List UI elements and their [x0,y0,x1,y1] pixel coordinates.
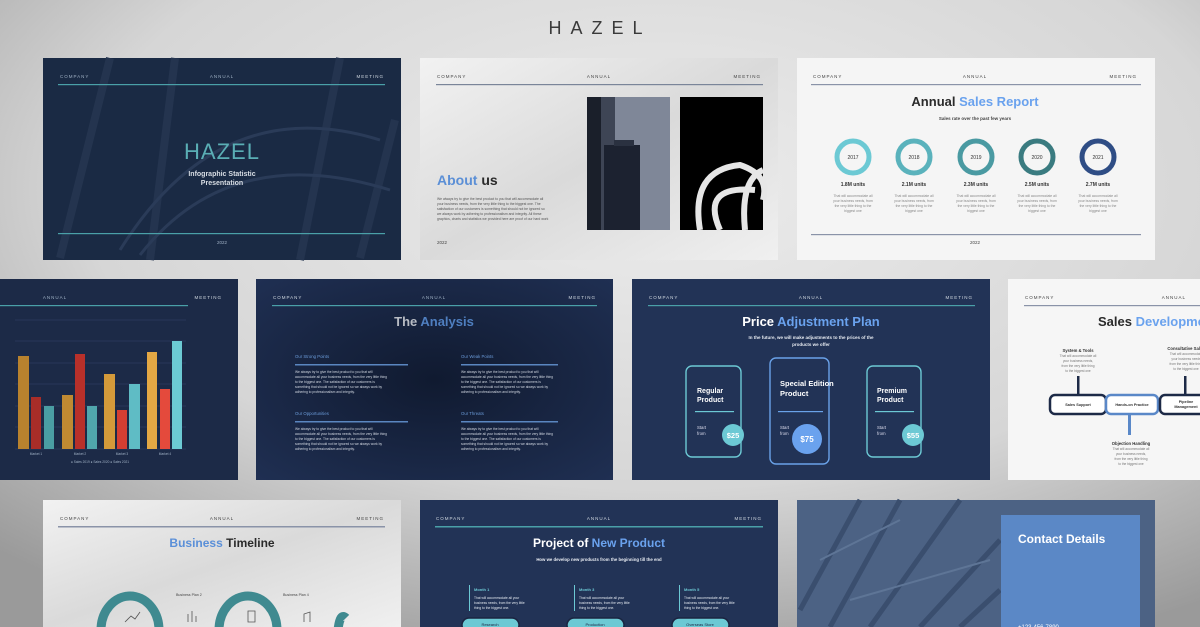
slide: annual sales report: COMPANY [813,74,842,79]
slide: the analysis: We always try to give the best product to you that will [461,427,539,431]
analysis blocks: Our Weak Points [461,354,493,359]
slide: the analysis: We always try to give the best product to you that will [295,427,373,431]
ring chart: 2021 [1092,155,1104,161]
slide: business timeline: Business Plan 4 [283,593,309,597]
slide: the analysis: adhering to professionalism and integrity. [461,390,521,394]
month columns: business needs, from the very little [579,601,630,605]
process diagram: Pipeline [1179,400,1193,404]
ring chart: That will accommodate all [894,194,934,198]
slide: annual sales report [797,58,1155,260]
slide: about us: your business needs, from the very little thing to the biggest one. The [437,202,541,206]
card: regular: $25 [727,431,739,440]
slide: project of new product: ANNUAL [587,516,611,521]
ring chart: biggest one [844,209,862,213]
slide: the analysis: to the biggest one. The satisfaction of our customers is [461,380,541,384]
slide: price adjustment: Price Adjustment Plan [742,314,880,329]
slide: sales development: ANNUAL [1162,295,1186,300]
process diagram: your business needs, [1116,452,1146,456]
month columns: thing to the biggest one. [474,606,509,610]
month columns: Month 1 [474,587,490,592]
month columns: thing to the biggest one. [684,606,719,610]
slide: the analysis: We always try to give the best product to you that will [295,370,373,374]
slide: the analysis: accommodate all your business needs, from the very little thing [461,375,553,379]
slide: cover: Presentation [201,180,243,187]
process diagram: to the biggest one [1173,367,1199,371]
contact box [1001,515,1140,627]
slide: bar chart [0,279,238,480]
slide: annual sales report: ANNUAL [963,74,987,79]
ring chart: your business needs, from [956,199,996,203]
slide: business timeline: Business Plan 2 [176,593,202,597]
slide: business timeline: Business Timeline [169,536,275,550]
slide: bar chart: ● Sales 2019 ● Sales 2020 ● Sales 2021 [71,460,129,464]
card: special edition [770,358,834,464]
slide: annual sales report: 2022 [970,240,981,245]
slide: the analysis: something that should not be ignored so we always work by [295,385,382,389]
month columns: That will accommodate all your [579,596,625,600]
month columns: Overseas Store [686,622,715,627]
bars [18,341,182,449]
photo: white loops [680,97,764,230]
slide: cover: Infographic Statistic [188,171,256,178]
slide: annual sales report: MEETING [1109,74,1137,79]
slide: business timeline: ANNUAL [210,516,234,521]
ring chart: your business needs, from [1078,199,1118,203]
process diagram: your business needs [1171,357,1200,361]
photo: tower [587,97,670,230]
month columns: That will accommodate all your [684,596,730,600]
ring chart: That will accommodate all [1017,194,1057,198]
card: premium [867,366,924,457]
card: special edition: from [780,431,789,436]
slide: the analysis: adhering to professionalism and integrity. [461,447,521,451]
slide: sales development: COMPANY [1025,295,1054,300]
ring chart: the very little thing to the [1019,204,1055,208]
ring chart: the very little thing to the [958,204,994,208]
slide: the analysis: something that should not be ignored so we always work by [461,442,548,446]
ring chart [833,141,1118,213]
slide: project of new product: Project of New Product [533,536,665,550]
slide: cover: 2022 [217,240,228,245]
process diagram: System & Tools [1062,348,1094,353]
slide: about us [420,58,778,260]
card: regular [686,366,744,457]
month columns [462,585,735,627]
slide: the analysis: The Analysis [394,314,474,329]
ring chart: the very little thing to the [896,204,932,208]
slide: the analysis: accommodate all your business needs, from the very little thing [295,375,387,379]
slide: price adjustment: MEETING [945,295,973,300]
slide: the analysis: adhering to professionalism and integrity. [295,447,355,451]
slide: price adjustment [632,279,990,480]
analysis blocks: Our Strong Points [295,354,329,359]
slide: bar chart: Market 4 [159,452,171,456]
ring chart: 2020 [1031,155,1043,161]
process diagram: from the very little thing [1115,457,1148,461]
ring chart: 1.8M units [841,182,865,188]
slide: about us: MEETING [733,74,761,79]
brand title: HAZEL [548,18,652,38]
ring chart: your business needs, from [894,199,934,203]
slide: project of new product: How we develop new products from the beginning till the end [536,557,662,562]
slide: the analysis: MEETING [568,295,596,300]
process diagram: Hands-on Practice [1115,403,1149,407]
slide: the analysis: accommodate all your business needs, from the very little thing [295,432,387,436]
ring chart: 2019 [970,155,982,161]
slide: the analysis: accommodate all your business needs, from the very little thing [461,432,553,436]
slide: bar chart: Market 3 [116,452,128,456]
slide: the analysis: to the biggest one. The satisfaction of our customers is [461,437,541,441]
slide: business timeline: MEETING [356,516,384,521]
slide: the analysis: We always try to give the best product to you that will [461,370,539,374]
ring chart: 2.1M units [902,182,926,188]
slide: the analysis: something that should not be ignored so we always work by [295,442,382,446]
process diagram: Objection Handling [1112,441,1151,446]
ring chart: 2.5M units [1025,182,1049,188]
slide: about us: We always try to give the best product to you that will accommodate all [437,197,543,201]
slide: the analysis: something that should not be ignored so we always work by [461,385,548,389]
analysis blocks [295,354,493,416]
slide: cover: COMPANY [60,74,89,79]
month columns: Month 3 [579,587,595,592]
ring chart: 2017 [847,155,859,161]
month columns: business needs, from the very little [474,601,525,605]
card: regular: Product [697,397,724,404]
slide: project of new product: COMPANY [436,516,465,521]
ring chart: 2018 [908,155,920,161]
slide: annual sales report: Sales rate over the past few years [939,116,1012,121]
ring chart: That will accommodate all [833,194,873,198]
ring chart: biggest one [905,209,923,213]
slide: the analysis: COMPANY [273,295,302,300]
slide: bar chart: Market 2 [74,452,86,456]
slide: cover: MEETING [356,74,384,79]
process diagram [1050,346,1200,466]
ring chart: biggest one [967,209,985,213]
ring chart: the very little thing to the [1080,204,1116,208]
slide: about us: 2022 [437,240,448,245]
slide: business timeline [43,500,401,627]
ring chart: biggest one [1089,209,1107,213]
process diagram: Management [1174,405,1198,409]
card: premium: Product [877,397,904,404]
about heading: About us [437,172,498,188]
month columns: Production [585,622,605,627]
card: premium: Premium [877,388,907,395]
ring chart: the very little thing to the [835,204,871,208]
month columns: Research [481,622,499,627]
slide: about us: graphics, charts and statistics we provided here are proof of our hard work [437,217,549,221]
slide: the analysis: to the biggest one. The satisfaction of our customers is [295,380,375,384]
ring chart: your business needs, from [1017,199,1057,203]
slide: bar chart: MEETING [194,295,222,300]
slide: about us: we always work by adhering to professionalism and integrity. All these [437,212,542,216]
process diagram: your business needs, [1063,359,1093,363]
slide: bar chart: Market 1 [30,452,42,456]
process diagram: to the biggest one [1065,369,1091,373]
card: special edition: Start [780,425,790,430]
slide: about us: satisfaction of our customers is something that should not be ignored so [437,207,545,211]
month columns: That will accommodate all your [474,596,520,600]
cover title: HAZEL [184,139,260,164]
slide: about us: ANNUAL [587,74,611,79]
card: regular: from [697,431,706,436]
month columns: thing to the biggest one. [579,606,614,610]
card: special edition: Special Edition [780,379,834,388]
ring chart: That will accommodate all [1078,194,1118,198]
process diagram: Sales Support [1065,403,1091,407]
ring chart: 2.3M units [964,182,988,188]
ring chart: That will accommodate all [956,194,996,198]
process diagram: That will accommodate all [1060,354,1097,358]
process diagram: from the very little thing [1062,364,1095,368]
process diagram: That will accommodate all [1113,447,1150,451]
ring chart: 2.7M units [1086,182,1110,188]
ring chart: biggest one [1028,209,1046,213]
slide: annual sales report: Annual Sales Report [911,94,1039,109]
slide: sales development [1008,279,1200,480]
card: regular: Regular [697,388,723,395]
slide: price adjustment: ANNUAL [799,295,823,300]
card: special edition: Product [780,389,809,398]
slide: about us: COMPANY [437,74,466,79]
month columns: business needs, from the very little [684,601,735,605]
slide: cover [43,58,401,260]
slide: the analysis: adhering to professionalism and integrity. [295,390,355,394]
slide: contact details [797,500,1155,627]
slide: the analysis: to the biggest one. The satisfaction of our customers is [295,437,375,441]
slide: price adjustment: In the future, we will make adjustments to the prices of the [748,335,874,340]
slide: project of new product: MEETING [734,516,762,521]
slide: price adjustment: COMPANY [649,295,678,300]
ring chart: your business needs, from [833,199,873,203]
slide: bar chart: ANNUAL [43,295,67,300]
card: special edition: $75 [800,435,814,444]
analysis blocks: Our Opportunities [295,411,329,416]
month columns: Month 5 [684,587,700,592]
slide: project of new product [420,500,778,627]
process diagram: to the biggest one [1118,462,1144,466]
slide: cover: ANNUAL [210,74,234,79]
slide: price adjustment: products we offer [792,342,830,347]
slide: business timeline: COMPANY [60,516,89,521]
slide: the analysis [256,279,613,480]
timeline arcs [101,596,346,627]
card: premium: $55 [907,431,919,440]
slide: the analysis: ANNUAL [422,295,446,300]
analysis blocks: Our Threats [461,411,484,416]
contact box: Contact Details [1018,532,1106,546]
card: regular: Start [697,425,707,430]
card: premium: Start [877,425,887,430]
card: premium: from [877,431,886,436]
